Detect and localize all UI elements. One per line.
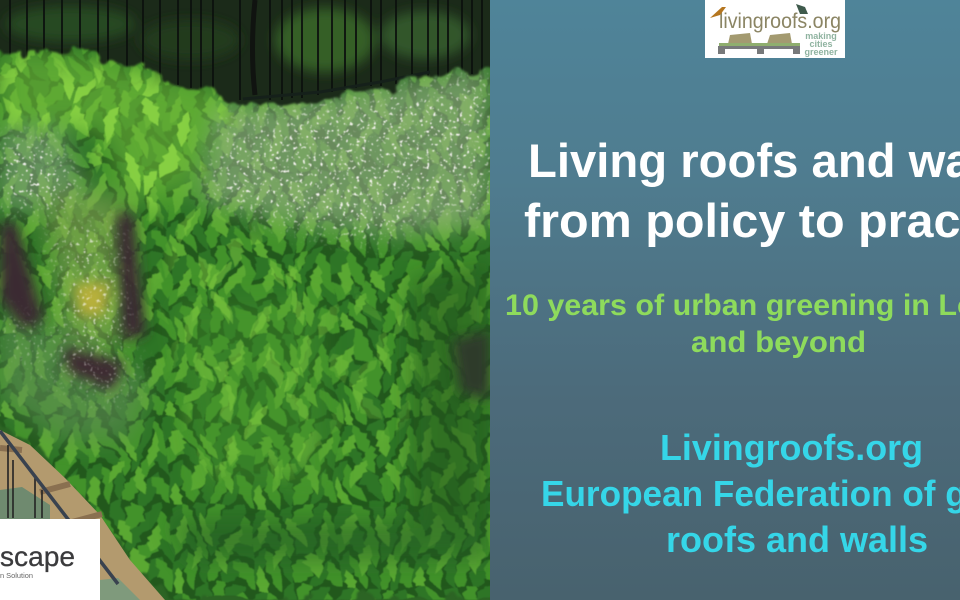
fence and trees behind the wall: [0, 0, 490, 110]
organisers: roofs and walls: [666, 519, 928, 560]
logo tagline: [804, 31, 838, 57]
icon: orange butterfly: [710, 7, 726, 18]
white flowers: [0, 68, 490, 410]
subtitle: [505, 289, 960, 359]
logo tagline: making: [805, 31, 837, 41]
foliage: [0, 45, 490, 600]
organisers: [541, 427, 960, 560]
logo tagline: cities: [809, 39, 833, 49]
photo: green wall: [0, 0, 490, 600]
logo tagline: greener: [804, 47, 838, 57]
logo wordmark: livingroofs.org: [719, 10, 841, 33]
logo: livingroofs.org: [705, 0, 845, 58]
icon: green roof buildings: [718, 33, 800, 54]
stairs: [0, 430, 165, 600]
logo: scape: [0, 519, 100, 600]
logo: scape: n Solution: [0, 573, 33, 580]
title: [524, 134, 960, 247]
stair handrail: [0, 431, 118, 584]
subtitle: and beyond: [691, 326, 866, 359]
organisers: Livingroofs.org: [660, 427, 923, 468]
icon: dark butterfly: [796, 4, 808, 14]
panel: event details: [490, 0, 960, 600]
logo: scape: scape: [0, 541, 75, 572]
